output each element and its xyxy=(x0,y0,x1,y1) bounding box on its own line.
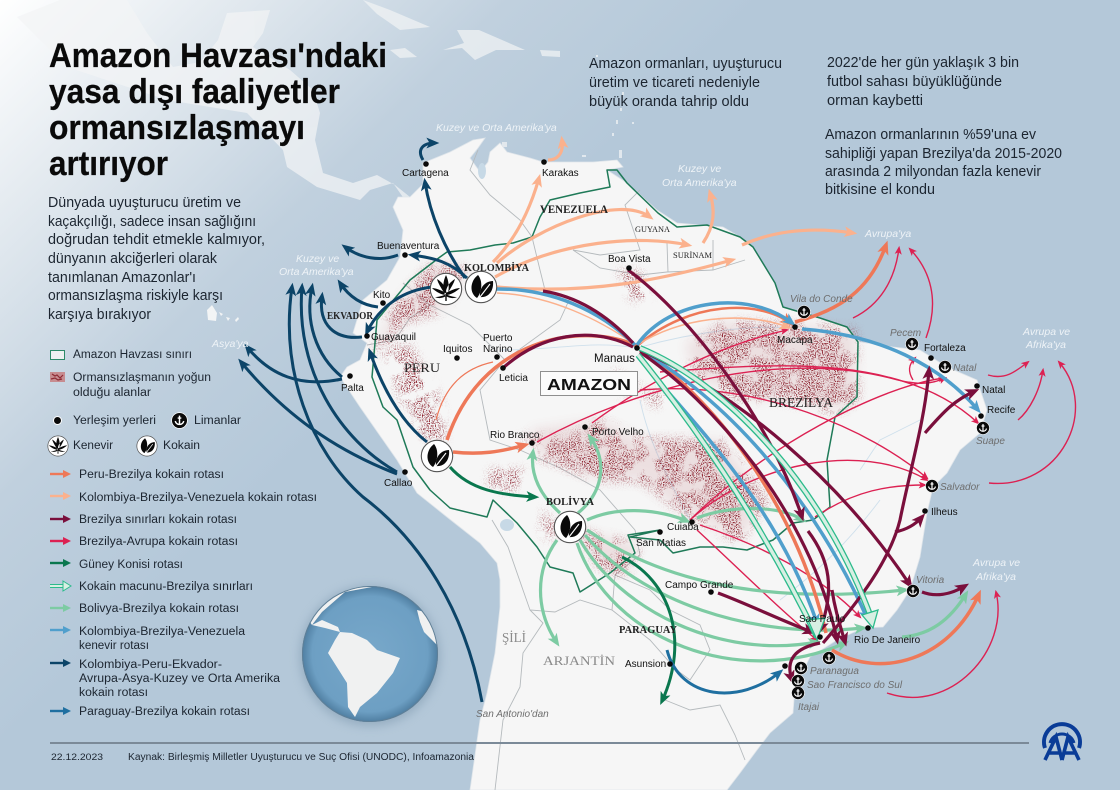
city labels: Manaus xyxy=(594,353,635,365)
legend: deforestation: Ormansızlaşmanın yoğun xyxy=(73,372,211,384)
intense deforestation areas xyxy=(372,265,858,575)
footer rule xyxy=(50,742,1029,744)
port labels: Vila do Conde xyxy=(790,294,853,305)
legend: ports: Limanlar xyxy=(194,415,241,427)
title: ormansızlaşmayı xyxy=(49,109,305,147)
title xyxy=(49,37,387,183)
port labels: San Antonio'dan xyxy=(476,709,549,720)
legend: route labels: Avrupa-Asya-Kuzey ve Orta Amerika xyxy=(79,673,281,685)
intro text: kaçakçılığı, sadece insan sağlığını xyxy=(48,214,256,230)
Bolivia-Brazil cocaine routes xyxy=(532,437,966,661)
city labels: Puerto xyxy=(483,333,513,344)
country labels: PARAGUAY xyxy=(619,624,677,636)
city labels: Palta xyxy=(341,383,364,394)
Amazon label box xyxy=(540,372,638,396)
Brazil borders cocaine routes xyxy=(503,270,975,680)
city labels: Campo Grande xyxy=(665,580,734,591)
legend: coca: Kokain xyxy=(163,440,200,452)
callout: daily loss 2022 xyxy=(827,55,1019,109)
destination labels: Kuzey ve xyxy=(678,163,721,175)
city labels: Iquitos xyxy=(443,344,472,355)
country labels: VENEZUELA xyxy=(540,204,609,216)
legend: route labels: Brezilya sınırları kokain rotası xyxy=(79,514,237,526)
title: yasa dışı faaliyetler xyxy=(49,73,340,111)
destination labels: Orta Amerika'ya xyxy=(279,266,354,278)
legend: deforestation xyxy=(50,372,211,399)
title: Amazon Havzası'ndaki xyxy=(49,37,387,75)
lake Titicaca xyxy=(500,519,514,531)
cocaine paste to Brazil borders routes xyxy=(638,348,878,640)
destination labels: Kuzey ve xyxy=(296,253,339,265)
city labels: Rio Branco xyxy=(490,430,540,441)
destination labels: Afrika'ya xyxy=(1025,339,1066,351)
legend: route labels xyxy=(79,469,317,718)
legend: route labels: Kolombiya-Brezilya-Venezuela kokain rotası xyxy=(79,492,317,504)
port labels: Pecem xyxy=(890,328,921,339)
country labels: EKVADOR xyxy=(327,311,374,322)
callout: forests destroyed: üretim ve ticareti nedeniyle xyxy=(589,75,760,91)
country labels: ARJANTİN xyxy=(543,653,616,668)
city labels: Natal xyxy=(982,385,1005,396)
legend: route labels: kenevir rotası xyxy=(79,640,149,652)
destination labels xyxy=(211,122,1070,583)
port labels: Sao Francisco do Sul xyxy=(807,680,903,691)
callout: Brazil cannabis xyxy=(825,127,1062,198)
intro text: ormansızlaşma riskiyle karşı xyxy=(48,288,223,304)
city labels: Asunsion xyxy=(625,659,666,670)
city labels: Fortaleza xyxy=(924,343,966,354)
Galapagos islands xyxy=(207,305,239,322)
destination labels: Asya'ya xyxy=(211,338,249,350)
AA logo xyxy=(1044,724,1080,760)
legend: Amazon basin: Amazon Havzası sınırı xyxy=(73,349,192,361)
city labels: Narino xyxy=(483,344,513,355)
country borders xyxy=(367,150,745,790)
callout: Brazil cannabis: arasında 2 milyondan fazla kenevir xyxy=(825,164,1041,180)
Amazon label box: AMAZON xyxy=(547,377,631,394)
city labels: Karakas xyxy=(542,168,579,179)
port labels: Itajai xyxy=(798,702,820,713)
port markers xyxy=(792,306,990,700)
callout: forests destroyed xyxy=(589,56,782,110)
title: artırıyor xyxy=(49,145,168,183)
destination labels: Avrupa ve xyxy=(972,557,1020,569)
intro text: doğrudan tehdit etmekle kalmıyor, xyxy=(48,232,265,248)
intro text: karşıya bırakıyor xyxy=(48,307,151,323)
city labels: Recife xyxy=(987,405,1016,416)
Amazon basin border xyxy=(372,170,858,592)
Brazil-Europe cocaine routes xyxy=(537,248,1075,697)
city labels: Leticia xyxy=(499,373,528,384)
country labels: SURİNAM xyxy=(673,251,712,260)
port labels: Salvador xyxy=(940,482,980,493)
legend xyxy=(48,349,317,718)
icon: coca Colombia xyxy=(465,271,497,303)
destination labels: Afrika'ya xyxy=(975,571,1016,583)
callout: daily loss 2022: orman kaybetti xyxy=(827,93,923,109)
destination labels: Orta Amerika'ya xyxy=(662,177,737,189)
legend: route labels: Paraguay-Brezilya kokain rotası xyxy=(79,706,250,718)
callout: forests destroyed: Amazon ormanları, uyuşturucu xyxy=(589,56,782,72)
country labels: PERU xyxy=(404,360,441,375)
city labels: Buenaventura xyxy=(377,241,440,252)
city markers xyxy=(347,159,984,669)
land: South America xyxy=(340,138,987,790)
icon: cannabis Colombia xyxy=(430,273,462,305)
callout: forests destroyed: büyük oranda tahrip oldu xyxy=(589,94,749,110)
legend: route labels: Peru-Brezilya kokain rotası xyxy=(79,469,224,481)
country labels: BREZİLYA xyxy=(769,395,833,410)
city labels: Kito xyxy=(373,290,391,301)
country labels xyxy=(327,204,833,668)
Southern Cone routes xyxy=(450,467,675,701)
callout: Brazil cannabis: Amazon ormanlarının %59'una ev xyxy=(825,127,1037,143)
port labels: Natal xyxy=(953,363,977,374)
Peru-Brazil cocaine routes xyxy=(436,245,979,664)
legend: settlements: Yerleşim yerleri xyxy=(73,415,156,427)
legend: route labels: Bolivya-Brezilya kokain rotası xyxy=(79,603,239,615)
legend: coca xyxy=(137,436,200,456)
legend: deforestation: olduğu alanlar xyxy=(73,387,151,399)
legend: route labels: Kolombiya-Brezilya-Venezuela xyxy=(79,626,246,638)
port labels: Vitoria xyxy=(916,575,945,586)
city labels xyxy=(341,168,1016,670)
lake Maracaibo xyxy=(478,163,486,179)
legend: route labels: Brezilya-Avrupa kokain rotası xyxy=(79,536,238,548)
city labels: San Matias xyxy=(636,538,686,549)
destination labels: Kuzey ve Orta Amerika'ya xyxy=(436,122,557,134)
country labels: KOLOMBİYA xyxy=(464,262,529,274)
port labels xyxy=(476,294,1005,720)
city labels: Cuiaba xyxy=(667,522,699,533)
country labels: ŞİLİ xyxy=(502,630,526,646)
legend: route labels: kokain rotası xyxy=(79,687,148,699)
city labels: Cartagena xyxy=(402,168,449,179)
rivers and lakes xyxy=(500,327,920,600)
port labels: Paranagua xyxy=(810,666,859,677)
legend: route arrows xyxy=(50,470,71,715)
globe xyxy=(300,583,440,726)
callout: daily loss 2022: futbol sahası büyüklüğünde xyxy=(827,74,1002,90)
country labels: GUYANA xyxy=(635,225,670,234)
destination labels: Avrupa ve xyxy=(1022,326,1070,338)
city labels: Callao xyxy=(384,478,413,489)
callout: Brazil cannabis: sahipliği yapan Brezilya'da 2015-2020 xyxy=(825,146,1062,162)
city labels: Macapa xyxy=(777,335,813,346)
intro text xyxy=(48,195,265,323)
intro text: tanımlanan Amazonlar'ı xyxy=(48,270,196,286)
destination labels: Avrupa'ya xyxy=(864,228,911,240)
intro text: dünyanın akciğerleri olarak xyxy=(48,251,218,267)
city labels: Boa Vista xyxy=(608,254,651,265)
callout: daily loss 2022: 2022'de her gün yaklaşık 3 bin xyxy=(827,55,1019,71)
legend: cannabis: Kenevir xyxy=(73,440,113,452)
source: Kaynak: Birleşmiş Milletler Uyuşturucu ve Suç Ofisi (UNODC), Infoamazonia xyxy=(128,752,474,763)
Colombia-Peru-Ecuador-Europe-Asia-North and Central America routes xyxy=(241,143,482,702)
city labels: Guayaquil xyxy=(371,332,416,343)
intro text: Dünyada uyuşturucu üretim ve xyxy=(48,195,241,211)
city labels: Ilheus xyxy=(931,507,958,518)
legend: route labels: Kolombiya-Peru-Ekvador- xyxy=(79,659,222,671)
legend: cannabis xyxy=(48,436,113,456)
Colombia-Brazil-Venezuela cannabis routes xyxy=(495,289,978,623)
callout: Brazil cannabis: bitkisine el kondu xyxy=(825,182,935,198)
city labels: Porto Velho xyxy=(592,427,644,438)
legend: route labels: Güney Konisi rotası xyxy=(79,559,183,571)
land: Central America and Caribbean xyxy=(17,0,634,203)
icon: coca Bolivia xyxy=(554,511,586,543)
icon: coca Peru xyxy=(421,440,453,472)
Colombia-Brazil-Venezuela cocaine routes xyxy=(493,140,853,345)
legend: route labels: Kokain macunu-Brezilya sınırları xyxy=(79,581,253,593)
port labels: Suape xyxy=(976,436,1005,447)
city labels: Sao Paulo xyxy=(799,614,846,625)
country labels: BOLİVYA xyxy=(546,496,594,508)
city labels: Rio De Janeiro xyxy=(854,635,921,646)
legend: ports xyxy=(172,413,241,428)
date: 22.12.2023 xyxy=(51,752,103,763)
Paraguay-Brazil route xyxy=(667,650,780,693)
